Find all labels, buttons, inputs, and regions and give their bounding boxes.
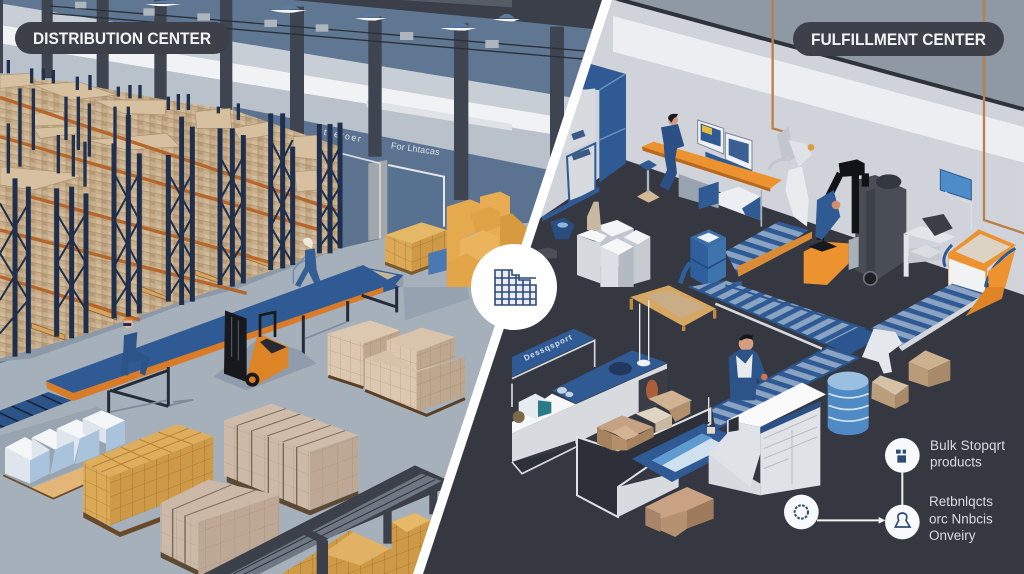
main conveyor xyxy=(46,265,470,413)
wall screen xyxy=(940,169,973,230)
cardboard parcel: upper xyxy=(909,350,950,387)
taupe pallet stack: center xyxy=(224,404,358,515)
packing bin xyxy=(577,390,710,517)
conveyor lower branch xyxy=(712,347,859,429)
conveyor orange rail xyxy=(737,232,812,277)
white bagged goods xyxy=(0,407,125,499)
process flow diagram xyxy=(784,438,920,539)
side wall xyxy=(512,0,1024,300)
desk legs and drawers xyxy=(679,174,719,208)
white storage cubes xyxy=(577,220,650,287)
diagonal divider xyxy=(413,0,612,574)
back sign counter xyxy=(512,329,595,407)
columns xyxy=(0,0,564,200)
monitors xyxy=(698,120,752,171)
wall light band xyxy=(613,16,1024,163)
cream pallet stack xyxy=(328,320,465,415)
conveyor junction xyxy=(825,327,882,355)
blue crate xyxy=(680,229,742,287)
rack base pallets xyxy=(32,253,270,340)
picking robot xyxy=(804,159,906,285)
flow label: returns and delivery: Onveiry xyxy=(929,528,976,543)
conveyor legs xyxy=(109,287,397,413)
ceiling light units xyxy=(75,2,499,48)
orange packing station xyxy=(944,229,1016,293)
ceiling beam xyxy=(294,0,602,29)
heading: distribution center xyxy=(15,22,230,54)
taupe pallet stack: front xyxy=(161,480,279,574)
worker on conveyor xyxy=(121,318,150,375)
racking block xyxy=(0,60,340,362)
parcels in bin xyxy=(597,390,692,450)
floor xyxy=(295,160,1024,574)
rear conveyor end xyxy=(356,265,404,287)
worker near racks xyxy=(293,237,322,287)
blue crates xyxy=(428,248,448,275)
flow label: returns and delivery: orc Nnbcis xyxy=(929,512,993,526)
icon: warehouse grid xyxy=(495,270,536,305)
heading: distribution center: DISTRIBUTION CENTER xyxy=(33,30,211,48)
bag on conveyor xyxy=(862,329,902,374)
blue storage drum xyxy=(827,372,869,435)
wooden pallet table xyxy=(630,285,716,331)
ceiling wires xyxy=(50,6,586,60)
workstation xyxy=(637,114,782,227)
white sorting machine xyxy=(709,383,826,495)
panel: distribution center xyxy=(0,0,592,574)
conveyor main branch xyxy=(689,280,865,349)
gold boxes under gantry xyxy=(280,513,430,574)
packing shelf xyxy=(904,214,955,277)
panel: fulfillment center xyxy=(511,0,1024,543)
forklift xyxy=(213,310,317,390)
conveyor right branch xyxy=(870,284,1005,351)
rack cross bracing xyxy=(0,140,340,333)
floor bins and small items xyxy=(512,202,601,258)
cardboard parcel: lower xyxy=(871,375,909,409)
stool xyxy=(637,160,660,203)
heading: fulfillment center xyxy=(793,22,1004,56)
overhead gantry conveyor xyxy=(203,465,448,574)
packing counter xyxy=(512,300,667,474)
heading: fulfillment center: FULFILLMENT CENTER xyxy=(811,31,986,49)
small gold pallet stack xyxy=(385,222,447,275)
scanning tray xyxy=(632,397,749,482)
orange beams xyxy=(0,97,337,320)
lower roller conveyor xyxy=(0,392,72,429)
floor cartons xyxy=(645,487,714,537)
worker at conveyor xyxy=(729,334,768,400)
back uprights xyxy=(8,60,238,187)
loading doors xyxy=(341,153,444,248)
robot arm xyxy=(769,127,814,227)
gold pallet stack xyxy=(83,424,213,537)
sign text: Dessqsport xyxy=(522,333,574,363)
worker at desk xyxy=(660,114,684,191)
orange pipes xyxy=(773,0,1024,233)
front rack uprights xyxy=(15,113,340,357)
wall sign: left: Stoeroer xyxy=(316,125,362,144)
desk top xyxy=(642,142,782,188)
ceiling lamps xyxy=(145,0,520,31)
ceiling xyxy=(629,0,1024,110)
storage cabinet xyxy=(542,63,626,222)
center badge xyxy=(471,244,557,330)
large cardboard boxes xyxy=(447,192,533,287)
icon node: bulk storage xyxy=(885,438,920,473)
back wall xyxy=(0,0,592,364)
roller conveyor: upper xyxy=(725,222,809,277)
flow label: returns and delivery: Retbnlqcts xyxy=(929,494,993,509)
flow label: bulk storage: Bulk Stopqrt xyxy=(930,438,1005,453)
icon node: delivery xyxy=(885,505,920,539)
flow label: bulk storage: products xyxy=(930,454,982,470)
floor xyxy=(0,222,529,574)
arrow head xyxy=(879,517,885,524)
wall sign: right: For Lhtacas xyxy=(390,140,441,157)
ceiling edge line xyxy=(619,0,1024,109)
icon node: intake xyxy=(784,495,819,529)
flow connector lines xyxy=(817,470,902,520)
rack top boxes xyxy=(0,73,320,192)
